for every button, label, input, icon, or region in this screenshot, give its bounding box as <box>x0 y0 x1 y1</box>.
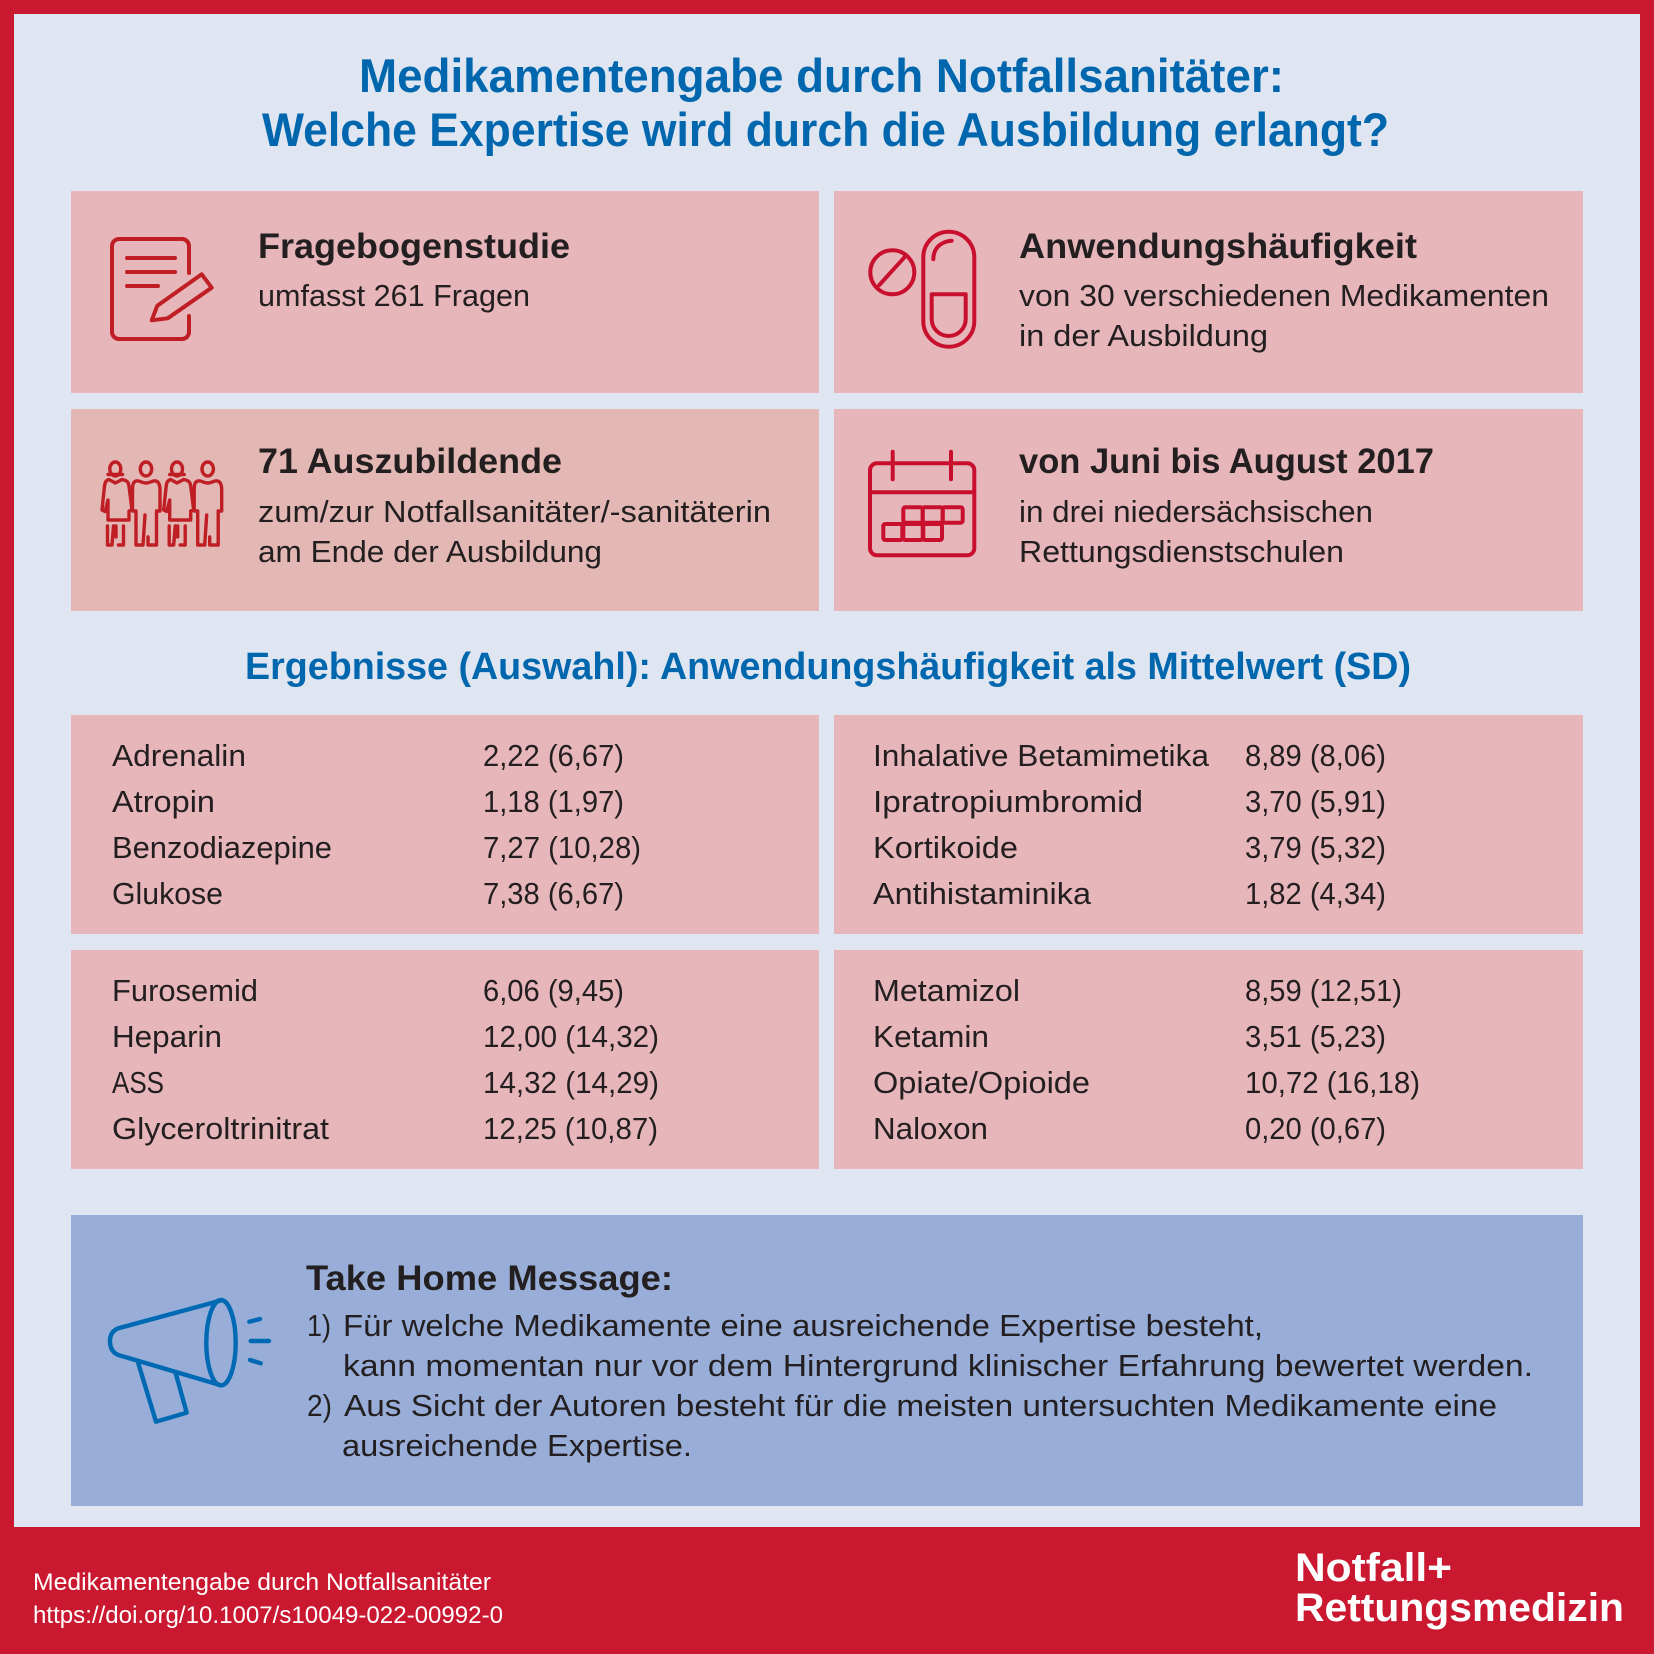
row: Antihistaminika: Antihistaminika <box>873 876 1092 911</box>
footer journal logo <box>1295 1546 1624 1630</box>
row: Opiate/Opioide: 10,72 (16,18) <box>1245 1065 1420 1100</box>
row: Adrenalin <box>112 738 624 773</box>
heading: Take Home Message: Take Home Message: <box>306 1259 673 1298</box>
text: message 2: 2) <box>307 1388 332 1423</box>
row: Atropin: Atropin <box>112 784 215 819</box>
text: trainees description: zum/zur Notfallsanitäter/-sanitäterin <box>258 494 771 529</box>
footer journal logo: Rettungsmedizin <box>1295 1586 1624 1630</box>
title <box>262 49 1389 156</box>
text: message 1: 1) <box>307 1308 331 1343</box>
row: Ipratropiumbromid: 3,70 (5,91) <box>1245 784 1386 819</box>
row: Glukose <box>112 876 624 911</box>
row: Kortikoide: 3,79 (5,32) <box>1245 830 1386 865</box>
icon: capsule and tablet <box>870 232 974 347</box>
text: 30 medications: von 30 verschiedenen Medikamenten <box>1019 278 1549 313</box>
text: 30 medications <box>1019 278 1549 353</box>
row: Heparin <box>112 1019 659 1054</box>
panel: Anwendungshäufigkeit <box>834 191 1583 393</box>
panel: results top right <box>834 715 1583 934</box>
row: Antihistaminika <box>873 876 1386 911</box>
text: message 1: Für welche Medikamente eine ausreichende Expertise besteht, <box>343 1308 1263 1343</box>
heading: von Juni bis August 2017: von Juni bis August 2017 <box>1019 442 1434 481</box>
text: 30 medications: in der Ausbildung <box>1019 318 1268 353</box>
row: Kortikoide: Kortikoide <box>873 830 1018 865</box>
title: Welche Expertise wird durch die Ausbildung erlangt? <box>262 103 1389 156</box>
panel: results bottom left <box>71 950 819 1169</box>
row: Metamizol: 8,59 (12,51) <box>1245 973 1402 1008</box>
text: schools <box>1019 494 1373 569</box>
row: Benzodiazepine: 7,27 (10,28) <box>483 830 641 865</box>
row: Adrenalin: Adrenalin <box>112 738 246 773</box>
panel: Fragebogenstudie <box>71 191 819 393</box>
row: Metamizol <box>873 973 1402 1008</box>
row: Glukose: Glukose <box>112 876 223 911</box>
row: Adrenalin: 2,22 (6,67) <box>483 738 624 773</box>
row: ASS: ASS <box>112 1065 164 1100</box>
heading: 71 Auszubildende: 71 Auszubildende <box>258 442 562 481</box>
text: schools: Rettungsdienstschulen <box>1019 534 1344 569</box>
footer citation: Medikamentengabe durch Notfallsanitäter <box>33 1569 491 1596</box>
panel: Auszubildende <box>71 409 819 611</box>
icon: four people <box>102 462 222 545</box>
row: Naloxon <box>873 1111 1386 1146</box>
heading: Fragebogenstudie: Fragebogenstudie <box>258 227 570 266</box>
icon: megaphone <box>110 1300 269 1422</box>
row: Glukose: 7,38 (6,67) <box>483 876 624 911</box>
panel: results top left <box>71 715 819 934</box>
row: Inhalative Betamimetika <box>873 738 1386 773</box>
row: Heparin: 12,00 (14,32) <box>483 1019 659 1054</box>
row: Glyceroltrinitrat: 12,25 (10,87) <box>483 1111 658 1146</box>
footer journal logo: Notfall+ <box>1295 1546 1452 1590</box>
footer citation <box>33 1569 503 1629</box>
text: message 1: kann momentan nur vor dem Hintergrund klinischer Erfahrung bewertet werden. <box>343 1348 1533 1383</box>
row: Opiate/Opioide: Opiate/Opioide <box>873 1065 1090 1100</box>
text: schools: in drei niedersächsischen <box>1019 494 1373 529</box>
footer citation: https://doi.org/10.1007/s10049-022-00992-0 <box>33 1602 503 1629</box>
row: Antihistaminika: 1,82 (4,34) <box>1245 876 1386 911</box>
row: Benzodiazepine <box>112 830 641 865</box>
heading: Ergebnisse: Ergebnisse (Auswahl): Anwendungshäufigkeit als Mittelwert (SD) <box>245 646 1411 688</box>
row: Furosemid: 6,06 (9,45) <box>483 973 624 1008</box>
row: Metamizol: Metamizol <box>873 973 1020 1008</box>
text: message 2 <box>307 1388 1497 1463</box>
row: ASS: 14,32 (14,29) <box>483 1065 659 1100</box>
title: Medikamentengabe durch Notfallsanitäter: <box>359 49 1284 102</box>
row: Opiate/Opioide <box>873 1065 1420 1100</box>
row: Kortikoide <box>873 830 1386 865</box>
panel: Zeitraum <box>834 409 1583 611</box>
panel: results bottom right <box>834 950 1583 1169</box>
text: number of questions: umfasst 261 Fragen <box>258 278 530 313</box>
heading: Anwendungshäufigkeit: Anwendungshäufigkeit <box>1019 227 1417 266</box>
icon: calendar <box>870 452 974 555</box>
row: Ketamin: 3,51 (5,23) <box>1245 1019 1386 1054</box>
text: trainees description <box>258 494 771 569</box>
row: Ipratropiumbromid: Ipratropiumbromid <box>873 784 1143 819</box>
row: Glyceroltrinitrat <box>112 1111 658 1146</box>
icon: questionnaire with pencil <box>112 239 212 339</box>
row: Naloxon: 0,20 (0,67) <box>1245 1111 1386 1146</box>
row: Atropin <box>112 784 624 819</box>
text: message 1 <box>307 1308 1533 1383</box>
row: Glyceroltrinitrat: Glyceroltrinitrat <box>112 1111 329 1146</box>
text: message 2: ausreichende Expertise. <box>342 1428 692 1463</box>
panel: take home message <box>71 1215 1583 1506</box>
row: Furosemid <box>112 973 624 1008</box>
row: Inhalative Betamimetika: Inhalative Betamimetika <box>873 738 1210 773</box>
row: Heparin: Heparin <box>112 1019 222 1054</box>
text: trainees description: am Ende der Ausbildung <box>258 534 602 569</box>
row: Ipratropiumbromid <box>873 784 1386 819</box>
row: ASS <box>112 1065 659 1100</box>
row: Benzodiazepine: Benzodiazepine <box>112 830 332 865</box>
row: Furosemid: Furosemid <box>112 973 258 1008</box>
row: Inhalative Betamimetika: 8,89 (8,06) <box>1245 738 1386 773</box>
text: message 2: Aus Sicht der Autoren besteht für die meisten untersuchten Medikamente eine <box>344 1388 1497 1423</box>
row: Naloxon: Naloxon <box>873 1111 988 1146</box>
row: Ketamin: Ketamin <box>873 1019 989 1054</box>
row: Ketamin <box>873 1019 1386 1054</box>
row: Atropin: 1,18 (1,97) <box>483 784 624 819</box>
